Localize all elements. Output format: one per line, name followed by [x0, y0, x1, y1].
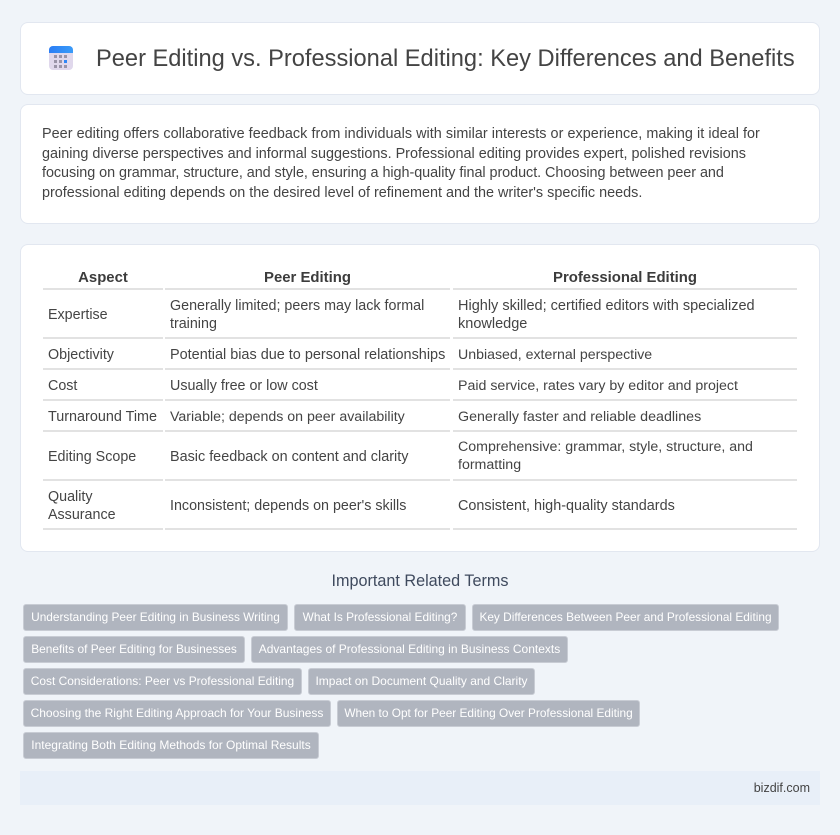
tag: [337, 700, 640, 727]
intro paragraph: gaining diverse perspectives and informal suggestions. Professional editing provides expert, polished revisions: [42, 146, 746, 162]
intro paragraph: [42, 126, 760, 201]
row: cost: Cost: [48, 378, 77, 394]
footer bar: [20, 771, 820, 805]
expertise peer: training: [170, 316, 217, 332]
tag: [23, 732, 319, 759]
objectivity peer: Potential bias due to personal relationships: [170, 347, 445, 363]
intro paragraph: focusing on grammar, structure, and style, ensuring a high-quality final product. Choosing between peer and: [42, 165, 724, 181]
intro text panel: [20, 104, 820, 224]
tag: [472, 604, 779, 631]
comparison table panel: [20, 244, 820, 552]
tag: [23, 668, 302, 695]
tag: [23, 604, 288, 631]
row: editing scope: Editing Scope: [48, 449, 136, 465]
tag: Integrating Both Editing Methods for Optimal Results: [31, 738, 311, 752]
row: expertise: Expertise: [48, 307, 108, 323]
header panel: [20, 22, 820, 95]
row: quality assurance: Quality: [48, 489, 92, 505]
turnaround professional: Generally faster and reliable deadlines: [458, 409, 701, 425]
expertise peer: Generally limited; peers may lack formal: [170, 298, 424, 314]
tag list: [23, 604, 779, 759]
tag: Choosing the Right Editing Approach for Your Business: [31, 706, 323, 720]
tag: [23, 636, 245, 663]
tag: [23, 700, 331, 727]
column heading: peer editing: Peer Editing: [264, 270, 351, 286]
tag: Advantages of Professional Editing in Business Contexts: [259, 642, 560, 656]
intro paragraph: professional editing depends on the desired level of refinement and the writer's specific needs.: [42, 185, 642, 201]
expertise peer: [170, 298, 424, 332]
objectivity professional: Unbiased, external perspective: [458, 346, 652, 362]
tag: Understanding Peer Editing in Business Writing: [31, 610, 280, 624]
cost professional: Paid service, rates vary by editor and project: [458, 378, 738, 394]
tag: [251, 636, 568, 663]
row: quality assurance: Assurance: [48, 507, 116, 523]
tag: Impact on Document Quality and Clarity: [315, 674, 528, 688]
tag: Key Differences Between Peer and Professional Editing: [479, 610, 772, 624]
footer source: bizdif.com: [754, 781, 810, 795]
turnaround peer: Variable; depends on peer availability: [170, 409, 405, 425]
quality professional: Consistent, high-quality standards: [458, 498, 675, 514]
column heading: aspect: Aspect: [78, 270, 128, 286]
row: objectivity: Objectivity: [48, 347, 114, 363]
tag: When to Opt for Peer Editing Over Professional Editing: [344, 706, 633, 720]
expertise professional: [458, 298, 755, 332]
tag: Cost Considerations: Peer vs Professional Editing: [31, 674, 294, 688]
expertise professional: Highly skilled; certified editors with specialized: [458, 298, 755, 314]
row: turnaround time: Turnaround Time: [48, 409, 157, 425]
cost peer: Usually free or low cost: [170, 378, 318, 394]
title: Peer Editing vs. Professional Editing: Key Differences and Benefits: [96, 46, 795, 72]
row: quality assurance: [48, 489, 116, 523]
tag: What Is Professional Editing?: [303, 610, 457, 624]
quality peer: Inconsistent; depends on peer's skills: [170, 498, 406, 514]
column heading: professional editing: Professional Editing: [553, 270, 697, 286]
tag: Benefits of Peer Editing for Businesses: [31, 642, 237, 656]
icon: calendar: [49, 46, 73, 70]
related terms heading: Important Related Terms: [332, 572, 508, 590]
tag: [308, 668, 535, 695]
tag: [294, 604, 466, 631]
intro paragraph: Peer editing offers collaborative feedback from individuals with similar interests or experience, making it ideal for: [42, 126, 760, 142]
scope professional: formatting: [458, 457, 521, 473]
scope professional: Comprehensive: grammar, style, structure, and: [458, 439, 753, 455]
expertise professional: knowledge: [458, 316, 527, 332]
scope professional: [458, 439, 753, 473]
scope peer: Basic feedback on content and clarity: [170, 449, 408, 465]
